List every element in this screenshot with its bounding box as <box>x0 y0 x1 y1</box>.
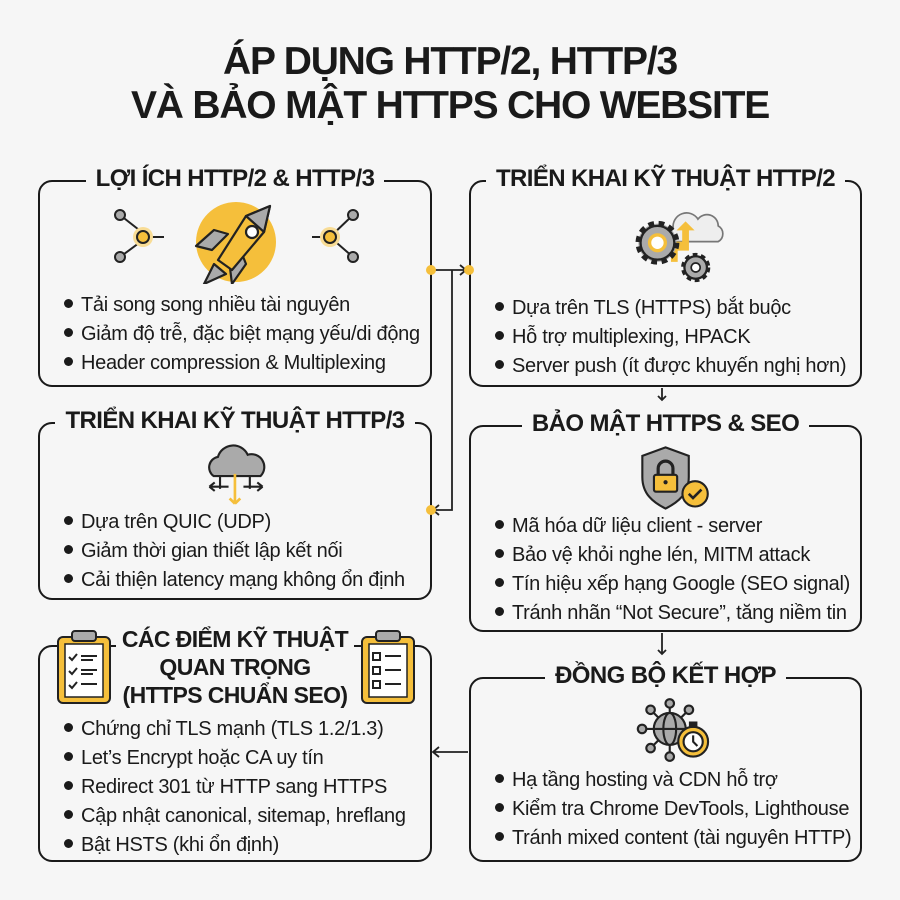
bullets: HTTPS & SEO: Mã hóa dữ liệu client - server <box>512 515 762 537</box>
bullets: HTTP/3: Cải thiện latency mạng không ổn định <box>81 569 405 591</box>
panel: HTTP/3 <box>38 422 432 600</box>
heading: HTTP/3: TRIỂN KHAI KỸ THUẬT HTTP/3 <box>65 407 405 434</box>
bullets: HTTP/2: Server push (ít được khuyến nghị hơn) <box>512 355 846 377</box>
bullets: HTTP/3: Giảm thời gian thiết lập kết nối <box>81 540 342 562</box>
bullets: technical points: Let’s Encrypt hoặc CA uy tín <box>81 747 323 769</box>
bullets: HTTPS & SEO: Bảo vệ khỏi nghe lén, MITM attack <box>512 544 810 566</box>
bullets: benefits: Tải song song nhiều tài nguyên <box>81 294 350 316</box>
heading: technical points: CÁC ĐIỂM KỸ THUẬT <box>122 626 348 652</box>
heading: technical points: QUAN TRỌNG <box>159 654 311 680</box>
bullets: HTTP/3: Dựa trên QUIC (UDP) <box>81 511 271 533</box>
bullets: HTTP/3 <box>64 511 405 591</box>
icon: cloud arrows <box>208 444 266 505</box>
bullets: sync <box>495 768 851 849</box>
icon: gears and cloud <box>636 212 724 282</box>
bullets: HTTPS & SEO: Tín hiệu xếp hạng Google (SEO signal) <box>512 573 850 595</box>
bullets: technical points: Cập nhật canonical, sitemap, hreflang <box>81 805 406 827</box>
icon: clipboard right <box>361 630 415 704</box>
bullets: HTTPS & SEO: Tránh nhãn “Not Secure”, tăng niềm tin <box>512 602 847 624</box>
title: ÁP DỤNG HTTP/2, HTTP/3 <box>223 40 677 83</box>
bullets: HTTP/2: Dựa trên TLS (HTTPS) bắt buộc <box>512 297 791 319</box>
heading: technical points: (HTTPS CHUẨN SEO) <box>123 682 347 708</box>
heading: benefits: LỢI ÍCH HTTP/2 & HTTP/3 <box>96 165 374 192</box>
icon: rocket with nodes <box>114 202 359 284</box>
title: VÀ BẢO MẬT HTTPS CHO WEBSITE <box>131 84 769 127</box>
heading: HTTP/2: TRIỂN KHAI KỸ THUẬT HTTP/2 <box>496 165 835 192</box>
bullets: sync: Hạ tầng hosting và CDN hỗ trợ <box>512 769 778 791</box>
bullets: HTTP/2: Hỗ trợ multiplexing, HPACK <box>512 326 750 348</box>
bullets: sync: Kiểm tra Chrome DevTools, Lighthouse <box>512 798 849 820</box>
bullets: sync: Tránh mixed content (tài nguyên HTTP) <box>512 827 851 849</box>
heading: sync: ĐỒNG BỘ KẾT HỢP <box>555 662 776 689</box>
icon: globe and stopwatch <box>636 698 710 762</box>
icon: clipboard left <box>57 630 111 704</box>
title <box>131 39 769 127</box>
panel: sync <box>469 677 862 862</box>
heading: technical points <box>116 626 354 708</box>
bullets: technical points <box>64 718 406 856</box>
bullets: benefits: Header compression & Multiplexing <box>81 352 386 374</box>
bullets: benefits: Giảm độ trễ, đặc biệt mạng yếu/di động <box>81 323 420 345</box>
panel: HTTP/2 <box>469 180 862 387</box>
heading: HTTPS & SEO: BẢO MẬT HTTPS & SEO <box>532 410 799 437</box>
bullets: technical points: Bật HSTS (khi ổn định) <box>81 834 279 856</box>
bullets: HTTPS & SEO <box>495 515 850 624</box>
bullets: HTTP/2 <box>495 296 846 377</box>
panel: benefits <box>38 180 432 387</box>
bullets: technical points: Chứng chỉ TLS mạnh (TLS 1.2/1.3) <box>81 718 383 740</box>
panel: HTTPS & SEO <box>469 425 862 632</box>
panel: technical points <box>38 645 432 862</box>
icon: shield lock <box>641 446 709 510</box>
bullets: technical points: Redirect 301 từ HTTP sang HTTPS <box>81 776 387 798</box>
bullets: benefits <box>64 294 420 374</box>
